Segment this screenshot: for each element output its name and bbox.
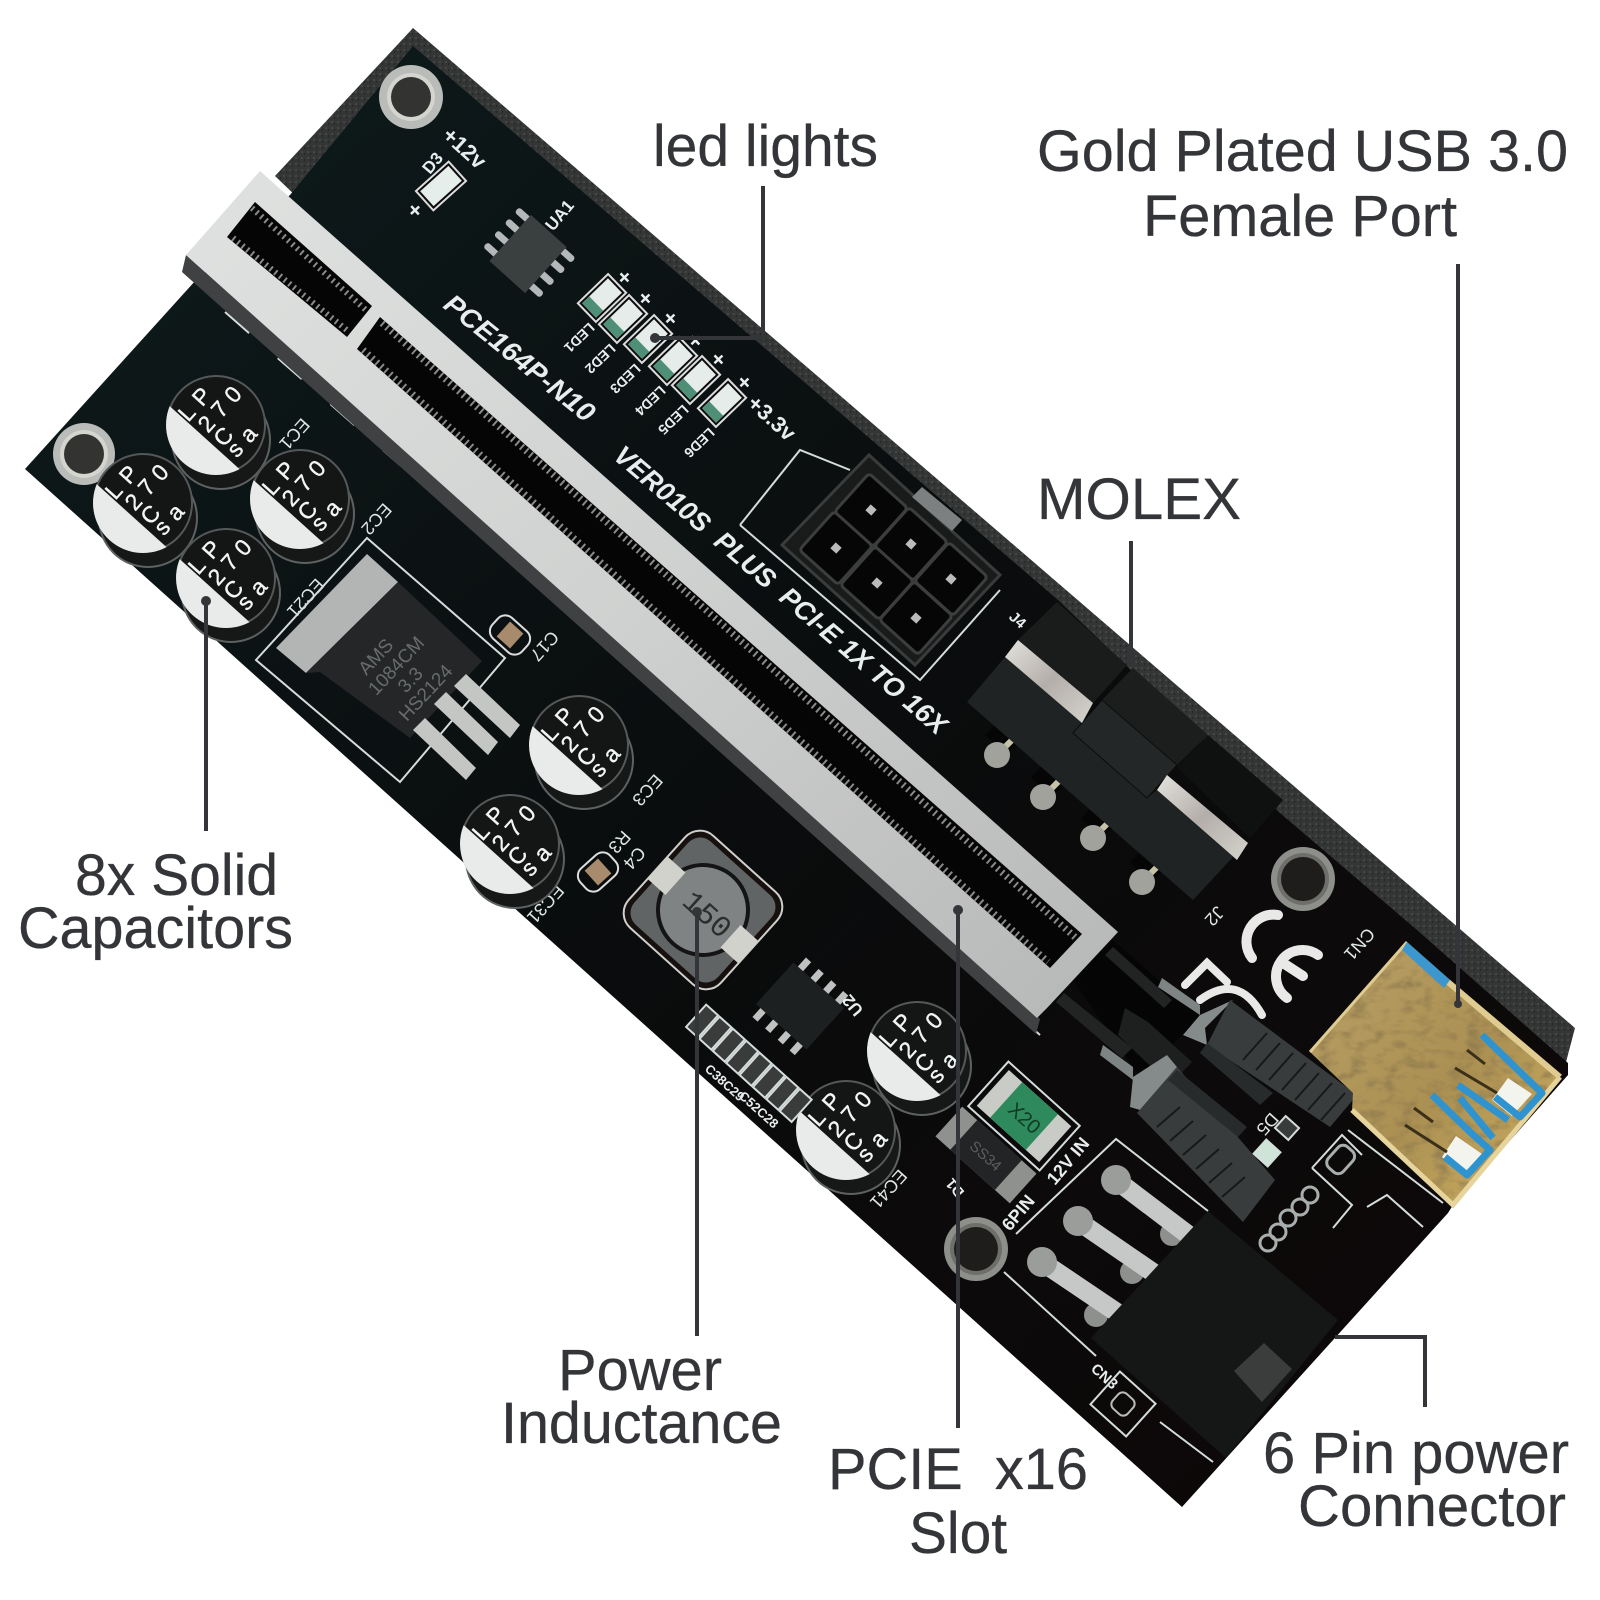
capacitor C4 small (574, 848, 622, 896)
callout: gold plated USB: Gold Plated USB 3.0 (1037, 119, 1568, 184)
capacitor EC2: sa (148, 493, 195, 540)
silkscreen EC21: EC21 (283, 575, 328, 621)
callout: six pin power connector (1263, 1337, 1569, 1539)
capacitor EC1: C (208, 422, 238, 451)
socket cell 6 (879, 581, 953, 655)
clip ridges (1157, 1033, 1345, 1197)
gold plated USB 3.0 port (1310, 942, 1560, 1205)
capacitor EC3 (230, 430, 369, 569)
capacitor EC31 (440, 775, 579, 914)
silkscreen model text: PCE164P-N10 (438, 288, 601, 428)
LED 6 (668, 368, 763, 461)
silkscreen C4: C4 (619, 843, 650, 873)
LED 1 (548, 263, 643, 356)
regulator marking: AMS (355, 635, 398, 680)
lower clip flange (1168, 1070, 1247, 1137)
callout: led lights: led lights (653, 114, 878, 179)
molex right block (1177, 735, 1283, 838)
capacitor EC40: 270 (893, 1002, 952, 1063)
LED 1: LED1 (561, 320, 598, 356)
USB top blue strip (1402, 942, 1450, 988)
capacitor EC31: LP (467, 795, 516, 845)
silkscreen C17: C17 (526, 627, 563, 665)
regulator marking: 1084CM (365, 633, 429, 700)
silkscreen D3: D3 (419, 149, 447, 178)
capacitor EC31: sa (515, 834, 562, 881)
upper clip head (1183, 1000, 1233, 1045)
regulator marking (349, 619, 458, 727)
status LED D5 and resistor R1: D5 (1252, 1109, 1283, 1139)
silver PCIe slot bracket (182, 171, 1118, 1034)
socket cell 1 (834, 473, 908, 547)
callout: PCIE x16 slot: PCIE x16 (828, 1437, 1088, 1502)
callout: gold plated USB (1037, 119, 1568, 1008)
capacitor EC41 (776, 1061, 915, 1200)
capacitor EC4: 270 (555, 696, 614, 757)
mounting hole left (53, 423, 115, 485)
LED 6: LED6 (681, 425, 718, 461)
capacitor EC21: sa (231, 568, 278, 615)
small SMD parts labels: C52C28 (736, 1088, 781, 1131)
capacitor EC4 (509, 676, 648, 815)
capacitor EC4: LP (536, 696, 585, 746)
silkscreen EC31: EC31 (523, 881, 568, 927)
regulator marking: 3.3 (394, 664, 428, 697)
molex pins (984, 715, 1170, 895)
small SMD parts grid (686, 1005, 812, 1122)
6-pin socket (782, 455, 1000, 665)
molex center block (1102, 668, 1208, 765)
capacitor EC4: C (571, 742, 601, 771)
small pad CN3 (1090, 1372, 1156, 1436)
diode D1 (935, 1107, 1037, 1203)
capacitor EC41: sa (851, 1120, 898, 1167)
callout: power inductance (501, 907, 782, 1456)
led lights row (548, 263, 763, 461)
socket cell 5 (914, 542, 988, 616)
silkscreen J4: J4 (1005, 608, 1030, 633)
silkscreen 6PIN: 6PIN (998, 1191, 1039, 1235)
callout: PCIE x16 slot: Slot (909, 1501, 1007, 1566)
LED 5 (642, 345, 737, 438)
lower clip body (1137, 1067, 1275, 1222)
silkscreen CN3: CN3 (1087, 1360, 1121, 1393)
molex lower body (967, 657, 1233, 900)
silkscreen 12v: +12v (438, 122, 492, 174)
silkscreen J2: J2 (1201, 902, 1228, 930)
silkscreen U2: U2 (839, 991, 867, 1020)
callout: capacitors: Capacitors (18, 896, 293, 961)
capacitor EC41: 270 (822, 1081, 881, 1142)
lower rail (1056, 993, 1132, 1058)
small parts by USB (1260, 1142, 1357, 1251)
capacitor EC40 (847, 982, 986, 1121)
LED 2 (569, 284, 664, 377)
silkscreen D1: D1 (943, 1175, 968, 1200)
LED 3: LED3 (607, 361, 644, 397)
molex connector (967, 602, 1283, 900)
lower clip arm (1100, 1045, 1133, 1080)
LED 4 (619, 326, 714, 419)
LED 2: + (632, 285, 659, 312)
x16 slot opening (357, 317, 1082, 968)
fuse (968, 1062, 1080, 1170)
silkscreen 3.3v: +3.3v (743, 390, 801, 446)
status LED D5 and resistor R1 (1252, 1109, 1299, 1167)
lower clip head (1130, 1055, 1177, 1110)
power inductor (615, 822, 791, 998)
capacitor EC1 (146, 356, 285, 495)
callout: PCIE x16 slot (828, 905, 1088, 1566)
capacitor EC31: C (502, 841, 532, 870)
diode D1: SS34 (966, 1138, 1005, 1175)
voltage regulator AMS1084 (256, 538, 520, 782)
callout: led lights (650, 114, 878, 343)
capacitor EC3: LP (257, 450, 306, 500)
upper clip body (1207, 1000, 1357, 1127)
molex front block (1073, 700, 1177, 798)
molex metal bar bottom (1157, 775, 1248, 860)
silkscreen R3: R3 (604, 827, 635, 857)
CE mark (1185, 915, 1318, 1015)
chip U2 (748, 954, 852, 1058)
silkscreen EC1: EC1 (275, 414, 314, 454)
silkscreen guide lines (200, 285, 1443, 1462)
capacitor EC31: 270 (486, 795, 545, 856)
capacitor EC40: sa (922, 1041, 969, 1088)
middle block (1118, 1008, 1192, 1085)
upper clip flange (1200, 1043, 1273, 1105)
LED 2: LED2 (582, 341, 619, 377)
socket cell 4 (840, 546, 914, 620)
molex metal bar top (1005, 640, 1093, 723)
capacitor EC40: C (909, 1048, 939, 1077)
silkscreen EC2: EC2 (357, 499, 396, 539)
capacitor C17 small (486, 611, 534, 659)
chip UA1 (479, 206, 577, 302)
capacitor EC21 (156, 509, 295, 648)
capacitor EC21: C (218, 575, 248, 604)
silkscreen 12V IN: 12V IN (1043, 1134, 1093, 1189)
callout: molex: MOLEX (1037, 467, 1241, 532)
callout: gold plated USB: Female Port (1143, 184, 1457, 249)
callout: capacitors (18, 596, 293, 961)
small SMD parts labels: C38C29 (702, 1061, 747, 1104)
small SMD parts labels (702, 1061, 781, 1131)
LED 6: + (731, 369, 758, 396)
capacitor EC2: 270 (119, 454, 178, 515)
upper clip arm (1158, 978, 1200, 1015)
LED 5: + (705, 346, 732, 373)
capacitor EC3: 270 (276, 450, 335, 511)
silkscreen version text: VER010S PLUS PCI-E 1X TO 16X (608, 440, 955, 742)
LED D3: + (402, 197, 428, 224)
capacitor EC41: C (838, 1127, 868, 1156)
mounting hole right (1271, 847, 1335, 911)
capacitor EC21: 270 (202, 529, 261, 590)
capacitor EC3: sa (305, 489, 352, 536)
LED 4: LED4 (632, 383, 669, 419)
callout: capacitors: 8x Solid (75, 843, 278, 908)
LED 4: + (682, 327, 709, 354)
capacitor EC4: sa (584, 735, 631, 782)
capacitor EC2 (73, 434, 212, 573)
small slot opening (227, 202, 372, 337)
power inductor: 150 (674, 886, 737, 947)
USB contact windows (1492, 1078, 1532, 1116)
silkscreen EC41: EC41 (866, 1166, 911, 1212)
mounting hole top (379, 65, 443, 129)
silkscreen CN1: CN1 (1340, 924, 1379, 964)
socket cell 2 (799, 511, 873, 585)
silkscreen UA1: UA1 (542, 196, 578, 235)
callout: six pin power connector: Connector (1298, 1474, 1566, 1539)
capacitor EC1: 270 (192, 376, 251, 437)
USB slits and slots (1405, 1050, 1497, 1152)
upper rail (1105, 947, 1172, 1008)
capacitor EC2: LP (100, 454, 149, 504)
LED D3 (401, 162, 466, 224)
LED 5: LED5 (655, 402, 692, 438)
capacitor EC3: C (292, 496, 322, 525)
dark cavity behind bracket end (1056, 940, 1200, 1085)
mounting hole bottom (944, 1217, 1008, 1281)
regulator marking: HS2124 (395, 661, 458, 726)
LED 3: + (657, 305, 684, 332)
six pin silver pins (1027, 1165, 1195, 1327)
LED 1: + (611, 264, 638, 291)
capacitor EC2: C (135, 500, 165, 529)
capacitor EC1: sa (221, 415, 268, 462)
callout: power inductance: Power (558, 1338, 722, 1403)
LED 3 (594, 304, 689, 397)
callout: six pin power connector: 6 Pin power (1263, 1421, 1569, 1486)
capacitor EC40: LP (874, 1002, 923, 1052)
capacitor EC1: LP (173, 376, 222, 426)
molex upper left block (1018, 602, 1127, 703)
callout: power inductance: Inductance (501, 1391, 782, 1456)
foam backing (275, 28, 1575, 1066)
silkscreen EC3: EC3 (628, 770, 667, 810)
six pin power connector (1027, 1165, 1338, 1458)
USB blue tongues (1432, 1035, 1542, 1175)
fuse: X20 (1003, 1099, 1045, 1139)
capacitor EC41: LP (803, 1081, 852, 1131)
socket cell 3 (874, 507, 948, 581)
black USB plug clips (1100, 978, 1357, 1222)
capacitor EC21: LP (183, 529, 232, 579)
